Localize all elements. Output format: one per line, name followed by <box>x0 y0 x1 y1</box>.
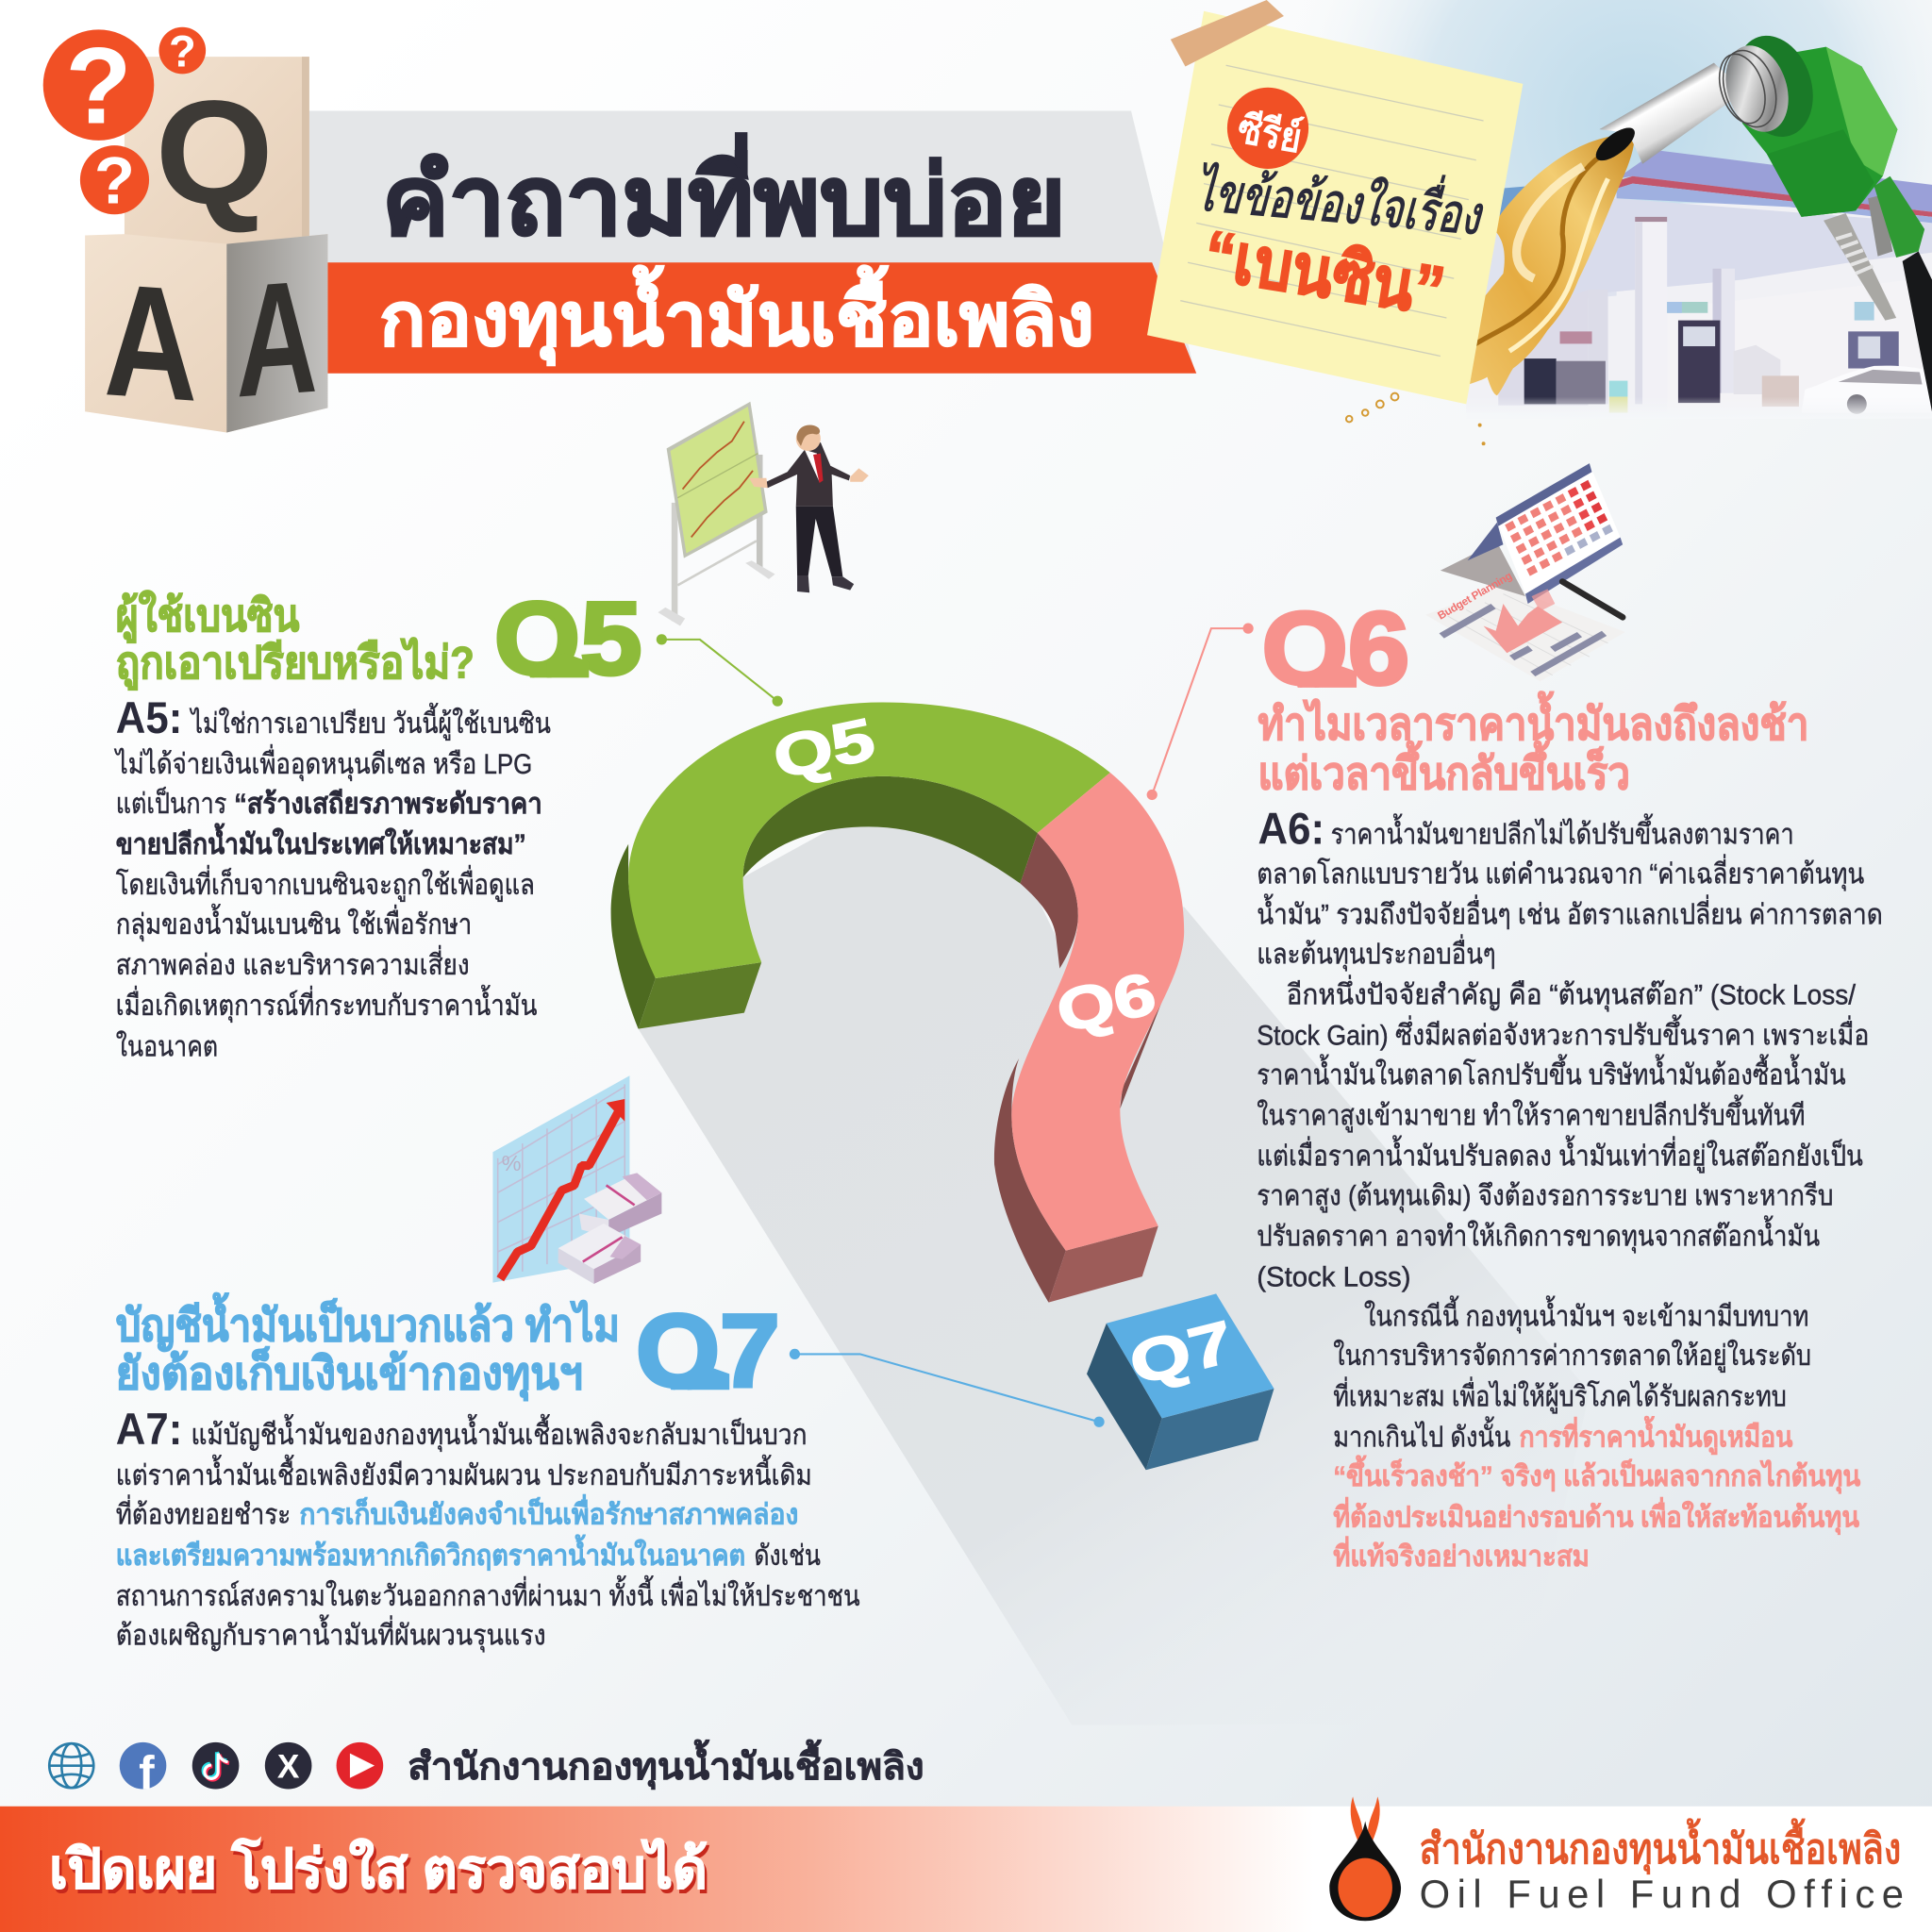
series title: ไขข้อข้องใจเรื่อง <box>1192 153 1487 247</box>
green end face <box>639 962 761 1029</box>
Q6 heading: แต่เวลาขึ้นกลับขึ้นเร็ว <box>1258 741 1630 798</box>
Q7 heading: บัญชีน้ำมันเป็นบวกแล้ว ทำไม <box>116 1292 620 1352</box>
illustration: presenter and chart board <box>658 402 869 626</box>
chart: 3D question mark <box>611 702 1274 1470</box>
pink inner wall <box>1020 833 1078 969</box>
Q5 connector <box>658 635 782 706</box>
Q7 block: Q7 <box>1124 1308 1240 1398</box>
section: Q6 <box>1148 591 1883 1573</box>
illustration: rising chart and money: % <box>502 1151 522 1175</box>
pink right sliver <box>1120 979 1171 1109</box>
icon: website globe <box>49 1743 93 1788</box>
A5 text: เมื่อเกิดเหตุการณ์ที่กระทบกับราคาน้ำมัน <box>116 985 537 1024</box>
Q5 big label: Q5 <box>494 581 641 696</box>
icon: Q and A wooden blocks: ? <box>94 143 135 218</box>
icon: Q and A wooden blocks: Q <box>156 71 274 236</box>
Q7 big label: Q7 <box>636 1293 780 1408</box>
illustration: calendar and budget paper <box>1425 463 1625 681</box>
Q5 label on shape: Q5 <box>768 706 880 791</box>
Q5 heading <box>116 590 475 691</box>
A5 text: ขายปลีกน้ำมันในประเทศให้เหมาะสม” <box>116 823 526 860</box>
A5 text: “สร้างเสถียรภาพระดับราคา <box>234 789 542 820</box>
Q7 connector <box>791 1350 1104 1426</box>
A6 text: ในการบริหารจัดการค่าการตลาดให้อยู่ในระดับ <box>1333 1340 1811 1373</box>
A5 text: กลุ่มของน้ำมันเบนซิน ใช้เพื่อรักษา <box>116 904 472 942</box>
A6 text: มากเกินไป ดังนั้น <box>1333 1416 1510 1453</box>
A6 text: Stock Gain) ซึ่งมีผลต่อจังหวะการปรับขึ้นราคา เพราะเมื่อ <box>1257 1015 1869 1052</box>
A5 text: แต่เป็นการ <box>116 786 226 820</box>
office name: สำนักงานกองทุนน้ำมันเชื้อเพลิง <box>408 1740 924 1790</box>
A6 text: ที่ต้องประเมินอย่างรอบด้าน เพื่อให้สะท้อนต้นทุน <box>1333 1496 1859 1535</box>
Q7 heading <box>116 1292 620 1401</box>
A7 text: ที่ต้องทยอยชำระ <box>116 1495 291 1531</box>
A6 text: ปรับลดราคา อาจทำให้เกิดการขาดทุนจากสต๊อกน้ำมัน <box>1257 1215 1820 1254</box>
icon: Q and A wooden blocks: A <box>104 250 197 436</box>
main title: คำถามที่พบบ่อย <box>382 133 1066 255</box>
icon: tiktok <box>192 1742 239 1789</box>
icon: X <box>265 1742 311 1789</box>
green inner wall <box>743 776 1038 883</box>
A6 text <box>1257 814 1883 1573</box>
Q6 connector <box>1148 625 1253 799</box>
A5 text: ในอนาคต <box>116 1030 218 1062</box>
series badge <box>1227 88 1308 169</box>
green top face <box>628 702 1110 978</box>
A7 text <box>116 1414 860 1654</box>
icon: Q and A wooden blocks <box>43 26 327 436</box>
Q6 heading: ทำไมเวลาราคาน้ำมันลงถึงลงช้า <box>1258 691 1808 749</box>
long shadow of question mark <box>639 801 1590 1725</box>
header title block <box>308 111 1196 374</box>
gray title banner <box>308 111 1195 374</box>
A6 text: การที่ราคาน้ำมันดูเหมือน <box>1519 1415 1793 1455</box>
icon: Q and A wooden blocks: A <box>237 247 318 432</box>
A5 text: ไม่ได้จ่ายเงินเพื่ออุดหนุนดีเซล หรือ LPG <box>114 744 532 782</box>
illustration: calendar and budget paper: Budget Planning <box>1436 570 1514 623</box>
Q6 big label <box>1264 609 1407 688</box>
A7 text: การเก็บเงินยังคงจำเป็นเพื่อรักษาสภาพคล่อง <box>299 1494 798 1531</box>
A5 text: สภาพคล่อง และบริหารความเสี่ยง <box>116 945 470 981</box>
slogan: เปิดเผย โปร่งใส ตรวจสอบได้ <box>49 1837 708 1900</box>
illustration: rising chart and money <box>492 1075 661 1284</box>
subtitle: กองทุนน้ำมันเชื้อเพลิง <box>379 265 1094 366</box>
A5 text: โดยเงินที่เก็บจากเบนซินจะถูกใช้เพื่อดูแล <box>116 865 535 902</box>
icon: facebook <box>120 1742 166 1799</box>
series keyword: “เบนซิน” <box>1199 217 1449 330</box>
A7 text: ต้องเผชิญกับราคาน้ำมันที่ผันผวนรุนแรง <box>116 1615 546 1654</box>
A6 text: ในกรณีนี้ กองทุนน้ำมันฯ จะเข้ามามีบทบาท <box>1364 1295 1808 1334</box>
pink top face <box>1011 773 1184 1251</box>
pink end face <box>1049 1226 1158 1303</box>
icon: Q and A wooden blocks: ? <box>169 26 196 76</box>
A6 text: และต้นทุนประกอบอื่นๆ <box>1257 934 1496 972</box>
A6 text: ในราคาสูงเข้ามาขาย ทำให้ราคาขายปลีกปรับขึ้นทันที <box>1257 1094 1805 1132</box>
A6 text: ราคาสูง (ต้นทุนเดิม) จึงต้องรอการระบาย เพราะหากรีบ <box>1257 1180 1834 1213</box>
orange subtitle banner <box>325 262 1196 374</box>
green side wall <box>611 844 656 1029</box>
icon: facebook: f <box>139 1746 155 1799</box>
A5 text: ไม่ใช่การเอาเปรียบ วันนี้ผู้ใช้เบนซิน <box>190 703 551 741</box>
Q6 label on shape: Q6 <box>1051 960 1161 1045</box>
footer band <box>0 1807 1932 1932</box>
icon: Q and A wooden blocks: ? <box>65 26 132 147</box>
A6 text: อีกหนึ่งปัจจัยสำคัญ คือ “ต้นทุนสต๊อก” (Stock Loss/ <box>1287 974 1857 1012</box>
A6 text: ที่แท้จริงอย่างเหมาะสม <box>1333 1536 1590 1573</box>
panel: sticky note <box>1147 0 1523 404</box>
A7 text: และเตรียมความพร้อมหากเกิดวิกฤตราคาน้ำมันในอนาคต <box>116 1534 745 1572</box>
A5 label: A5: <box>116 692 182 742</box>
Q5 heading: ผู้ใช้เบนซิน <box>116 590 299 644</box>
icon: youtube <box>337 1742 383 1789</box>
icon: oil pouring from nozzle <box>1346 135 1634 445</box>
logo: Oil Fuel Fund Office <box>1329 1796 1904 1921</box>
A7 text: ดังเช่น <box>754 1541 821 1572</box>
section: Q7 <box>116 1292 1104 1654</box>
section: Q5 <box>114 581 782 1062</box>
Q5 heading: ถูกเอาเปรียบหรือไม่? <box>116 636 475 691</box>
Q5 big label <box>496 600 641 677</box>
A6 label: A6: <box>1258 804 1324 854</box>
A7 text: แม้บัญชีน้ำมันของกองทุนน้ำมันเชื้อเพลิงจะกลับมาเป็นบวก <box>191 1414 808 1453</box>
A7 text: แต่ราคาน้ำมันเชื้อเพลิงยังมีความผันผวน ประกอบกับมีภาระหนี้เดิม <box>116 1455 812 1491</box>
Q7 heading: ยังต้องเก็บเงินเข้ากองทุนฯ <box>116 1345 583 1401</box>
A5 text <box>114 703 551 1062</box>
social icons row <box>49 1740 924 1799</box>
A7 label: A7: <box>116 1404 182 1454</box>
pink left side wall <box>994 1058 1066 1303</box>
icon: X: X <box>277 1749 300 1786</box>
icon: green fuel nozzle <box>1591 25 1932 411</box>
A7 text: สถานการณ์สงครามในตะวันออกกลางที่ผ่านมา ทั้งนี้ เพื่อไม่ให้ประชาชน <box>116 1575 860 1612</box>
A6 text: (Stock Loss) <box>1257 1262 1411 1293</box>
tape <box>1171 0 1284 67</box>
series badge: ซีรีย์ <box>1234 106 1306 162</box>
Q7 block <box>1087 1293 1274 1470</box>
gas station photo background <box>1220 0 1932 419</box>
slogan: เปิดเผย โปร่งใส ตรวจสอบได้ <box>52 1840 709 1904</box>
A6 text: ราคาน้ำมันขายปลีกไม่ได้ปรับขึ้นลงตามราคา <box>1331 814 1794 851</box>
A6 text: ที่เหมาะสม เพื่อไม่ให้ผู้บริโภคได้รับผลกระทบ <box>1333 1376 1787 1413</box>
A6 text: ราคาน้ำมันในตลาดโลกปรับขึ้น บริษัทน้ำมันต้องซื้อน้ำมัน <box>1257 1054 1846 1091</box>
A6 text: “ขึ้นเร็วลงช้า” จริงๆ แล้วเป็นผลจากกลไกต้นทุน <box>1333 1455 1861 1494</box>
logo: Oil Fuel Fund Office: Oil Fuel Fund Office <box>1420 1872 1904 1916</box>
Q6 big label: Q6 <box>1261 591 1409 707</box>
Q7 big label <box>638 1312 777 1391</box>
Q6 heading <box>1258 691 1808 798</box>
